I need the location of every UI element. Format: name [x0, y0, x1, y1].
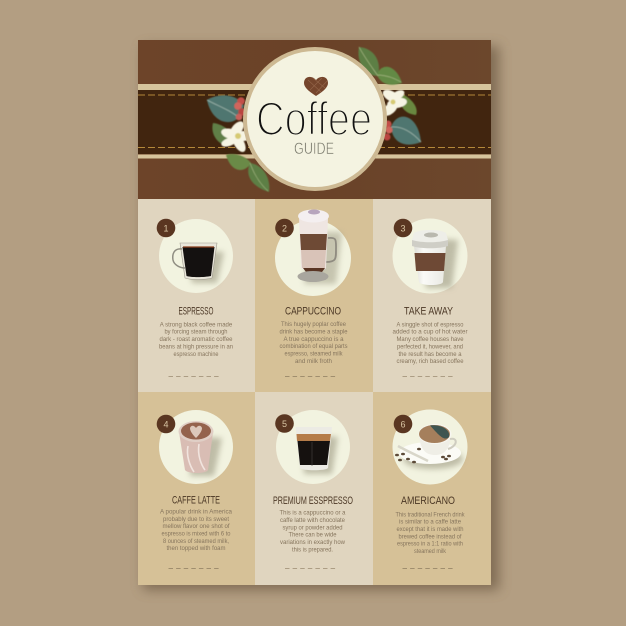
description: take away: perfected it, however, and: [397, 343, 463, 350]
icon: coffee cup and saucer: [395, 424, 463, 469]
description: americano: is similar to a caffe latte: [399, 519, 461, 526]
description: take away: creamy, rich based coffee: [396, 358, 464, 365]
label: take away: TAKE AWAY: [404, 306, 454, 318]
icon: espresso glass cup: [173, 243, 224, 283]
description: cappuccino: espresso, steamed milk: [284, 350, 343, 358]
description: cappuccino: drink has become a staple: [280, 328, 348, 335]
label: caffe latte: CAFFE LATTE: [172, 494, 220, 506]
number badge 5: 5: [282, 419, 287, 429]
description: espresso: beans at high pressure in an: [159, 343, 233, 350]
description: take away: A singgle shot of espresso: [396, 321, 464, 328]
number badge 1: [157, 219, 175, 237]
description: cappuccino: combination of equal parts: [280, 343, 348, 350]
description: espresso: by forcing steam through: [164, 329, 228, 336]
description: caffe latte: espresso is mixed with 6 to: [162, 530, 231, 538]
poster: [138, 40, 491, 585]
label: espresso: ESPRESSO: [178, 306, 214, 318]
description: caffe latte: then topped with foam: [166, 545, 226, 552]
description: premium espresso: syrup or powder added: [282, 524, 343, 531]
panel: cappuccino: [255, 199, 373, 392]
description: americano: brewed coffee instead of: [398, 533, 462, 540]
number badge 2: [275, 219, 294, 237]
icon: cappuccino glass: [298, 210, 342, 284]
botanical: right cluster: [358, 47, 421, 145]
description: espresso: [159, 321, 233, 358]
number badge 4: [157, 415, 175, 433]
title medallion: [243, 47, 387, 191]
panel: espresso: [138, 199, 255, 392]
description: caffe latte: A popular drink in America: [160, 508, 232, 515]
description: premium espresso: this is prepared.: [292, 546, 333, 553]
description: take away: [392, 321, 468, 365]
botanical: left cluster: [207, 95, 269, 192]
description: caffe latte: mellow flavor one shot of: [162, 523, 230, 530]
description: premium espresso: [280, 510, 346, 553]
icon: latte glass: [178, 421, 222, 476]
number badge 6: [394, 415, 412, 433]
number badge 4: 4: [163, 419, 169, 429]
description: cappuccino: [280, 321, 348, 365]
description: americano: This traditional French drink: [396, 511, 465, 518]
description: cappuccino: A true cappuccino is a: [284, 336, 344, 343]
description: americano: espresso in a 1:1 ratio with: [397, 541, 463, 548]
icon: premium espresso glass: [296, 427, 338, 474]
heading: Guide: GUIDE: [294, 140, 334, 158]
description: take away: the result has become a: [398, 351, 462, 358]
description: espresso: espresso machine: [174, 351, 219, 358]
panel: caffe latte: [138, 392, 255, 585]
description: espresso: A strong black coffee made: [160, 321, 233, 328]
number badge 5: [275, 414, 294, 433]
description: americano: steamed milk: [414, 548, 447, 555]
description: americano: except that it is made with: [396, 526, 464, 533]
panel: take away: [373, 199, 491, 392]
label: premium espresso: PREMIUM ESSPRESSO: [273, 495, 353, 507]
description: cappuccino: This hugely poplar coffee: [281, 321, 346, 328]
description: premium espresso: There can be wide: [288, 532, 337, 539]
icon: coffee bean heart: [304, 77, 328, 96]
description: cappuccino: and milk froth: [295, 358, 332, 365]
description: take away: Many coffee houses have: [396, 336, 464, 343]
description: premium espresso: variations in exactly how: [280, 539, 345, 546]
panel: premium espresso: [255, 392, 373, 585]
number badge 2: 2: [282, 223, 287, 233]
label: cappuccino: CAPPUCCINO: [285, 306, 341, 318]
description: caffe latte: 8 ounces of steamed milk,: [163, 538, 229, 545]
poster shadow: [143, 46, 499, 590]
number badge 3: 3: [400, 223, 406, 233]
description: caffe latte: probably due to its sweet: [163, 516, 229, 523]
panel: header banner: [138, 40, 491, 199]
panel: americano: [373, 392, 491, 585]
number badge 3: [394, 219, 412, 237]
number badge 1: 1: [163, 223, 169, 233]
icon: take away cup: [412, 230, 458, 288]
label: americano: AMERICANO: [401, 495, 455, 507]
description: americano: [396, 511, 465, 555]
description: caffe latte: [160, 508, 232, 552]
description: premium espresso: caffe latte with chocolate: [280, 517, 345, 524]
number badge 6: 6: [400, 419, 406, 429]
description: take away: added to a cup of hot water: [392, 329, 468, 336]
heading: Coffee: Coffee: [256, 92, 372, 145]
description: espresso: dark - roast aromatic coffee: [160, 336, 233, 343]
description: premium espresso: This is a cappuccino or a: [280, 510, 346, 517]
